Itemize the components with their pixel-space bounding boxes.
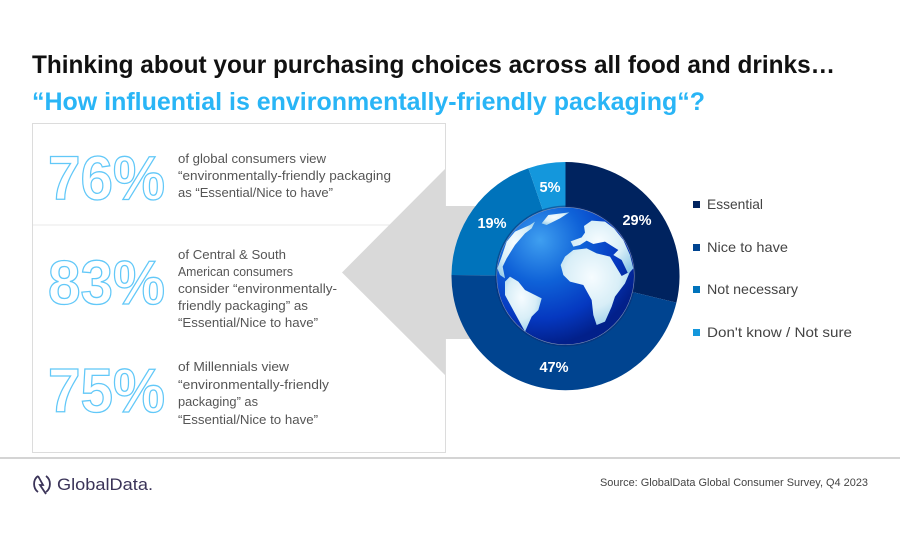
stat: 83% [48,247,337,330]
legend item: Essential: Essential [707,196,763,212]
segment: Essential 29% [566,162,680,303]
donut chart [451,162,680,390]
stat: 76% [48,144,391,214]
title [32,51,835,116]
title line 2: “How influential is environmentally-friendly packaging“? [32,88,705,116]
icon: logo mark [34,476,50,494]
stat: 83%: 83% [48,249,165,318]
stat: 76%: as “Essential/Nice to have” [178,185,333,200]
stat: 75%: “environmentally-friendly [178,377,330,392]
segment: Don't know 5% [528,162,566,211]
segment: Nice to have 47% [451,275,676,390]
icon: globe [495,206,636,346]
stat: 76%: 76% [48,144,165,214]
logo: GlobalData: GlobalData. [57,475,153,494]
Greenland [542,212,569,225]
stat: 75%: “Essential/Nice to have” [178,412,318,427]
Eurasia [571,221,633,274]
stat: 83%: of Central & South [178,247,286,262]
label: 19%: 19% [477,216,507,232]
source note: Source: GlobalData Global Consumer Survey, Q4 2023 [600,477,868,489]
title line 1: Thinking about your purchasing choices across all food and drinks… [32,51,835,79]
arrow: from globe to statistics [342,169,480,375]
segment: Not necessary 19% [452,168,543,275]
stat: 76%: of global consumers view [178,151,327,166]
stat: 75%: packaging” as [178,394,258,409]
Africa [561,248,630,325]
stat: 83%: consider “environmentally- [178,281,337,296]
legend item: Not necessary: Not necessary [707,281,798,297]
stat: 75% [48,357,330,427]
stat: 76%: “environmentally-friendly packaging [178,168,391,183]
legend item: Nice to have: Nice to have [707,239,788,255]
label: 47%: 47% [539,360,569,376]
stat: 83%: friendly packaging” as [178,298,309,313]
South America [505,277,542,332]
legend item: Don't know: Don't know / Not sure [707,324,852,340]
stat: 75%: of Millennials view [178,359,290,374]
North America [497,222,535,278]
stat: 83%: “Essential/Nice to have” [178,315,318,330]
label: 29%: 29% [622,213,652,229]
stat: 75%: 75% [48,357,165,426]
legend [693,196,852,340]
panel: key statistics [32,124,446,452]
label: 5%: 5% [540,180,561,196]
stat: 83%: American consumers [178,264,293,279]
